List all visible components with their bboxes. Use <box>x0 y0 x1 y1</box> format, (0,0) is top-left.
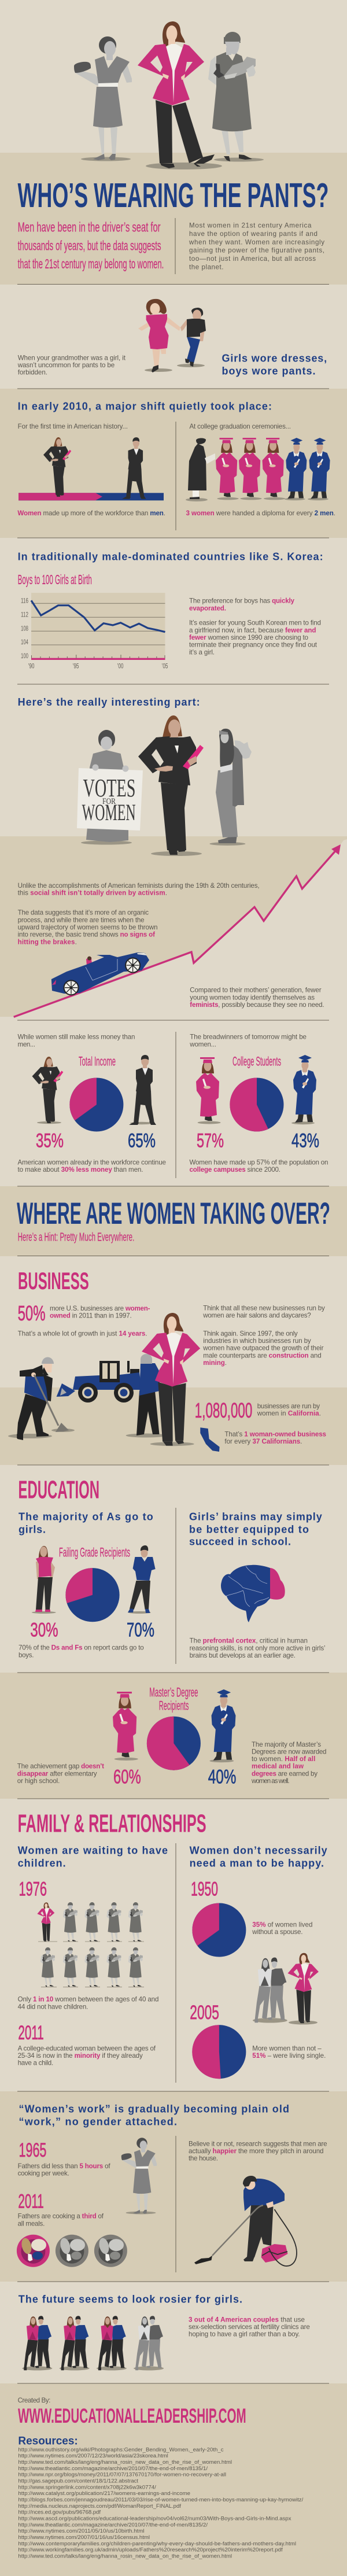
text: minority <box>18 2044 156 2067</box>
pie chart: failing grades <box>65 1568 120 1622</box>
heading: interesting part: Here’s the really interesting part: <box>18 696 200 708</box>
credit label: Created By: <box>18 2397 50 2404</box>
percentages: 57% <box>197 1130 224 1152</box>
heading: resources: Resources: <box>18 2435 78 2448</box>
chart: workforce bar <box>19 493 164 500</box>
text: minority: 25-34 is now in the minority if they already <box>18 2052 143 2060</box>
text: think again: Think that all these new businesses run by <box>203 1304 325 1312</box>
heading: need a man: need a man to be happy. <box>190 1858 324 1869</box>
panel: South Korea and interesting part background <box>0 538 347 836</box>
heading: majority of As: The majority of As go to <box>19 1511 153 1522</box>
illustration: girl casual <box>32 1546 56 1614</box>
resources list: http://www.nytimes.com/2011/05/10/us/10birth.html <box>18 2528 145 2534</box>
panel: growth chart light area <box>0 839 347 1186</box>
text: a third: all meals. <box>18 2220 45 2227</box>
percentages: 70% <box>127 1619 154 1641</box>
illustration: suffragist with votes for women sign: FOR <box>102 797 116 806</box>
text: happier: actually happier the more they pitch in around <box>189 2147 324 2155</box>
intro lead text: Men have been in the driver’s seat for <box>18 220 161 235</box>
resources list: http://www.npr.org/blogs/money/2011/07/07/137670170/for-women-no-recovery-at-all <box>18 2472 226 2478</box>
text: 30% less money <box>17 1158 166 1173</box>
resources list: http://blogs.forbes.com/jennagoudreau/2011/03/03/rise-of-women-turned-men-into-boys-manning-up-kay-hymowitz/ <box>18 2497 304 2503</box>
resources list: http://media.nucleus.naprojects.com/pdf/WomanReport_FINAL.pdf <box>18 2503 181 2509</box>
grandmother text: wasn’t uncommon for pants to be <box>17 361 115 369</box>
text: 35% without spouse <box>252 1921 312 1936</box>
text: a third: Fathers are cooking a third of <box>18 2213 104 2220</box>
text: master's majority: degrees are earned by <box>252 1770 318 1777</box>
text: California <box>224 1403 326 1445</box>
South Korea text: The preference for boys has quickly <box>189 597 295 605</box>
pie chart: 1950 <box>192 1903 246 1957</box>
text: California: That’s 1 woman-owned business <box>224 1430 326 1438</box>
resources list: http://www.nytimes.com/2007/01/16/us/16census.html <box>18 2534 150 2541</box>
intro paragraph <box>189 222 324 271</box>
illustration: graduation row <box>186 438 330 501</box>
text: 1 in 10: Only 1 in 10 women between the ages of 40 and <box>18 1996 158 2003</box>
illustration: girl in dress and boy in jeans <box>138 299 206 372</box>
text: achievement gap <box>17 1763 104 1785</box>
intro paragraph: the planet. <box>189 264 223 271</box>
panel: future background <box>0 2282 347 2383</box>
chart: boys to 100 girls line chart: ’00 <box>117 662 124 670</box>
resources list: http://www.ted.com/talks/lang/eng/hanna_rosin_new_data_on_the_rise_of_women.html <box>18 2459 232 2466</box>
heading: women's work: “work,” no gender attached. <box>19 2116 177 2128</box>
text: prefrontal cortex: brains but develops at an earlier age. <box>190 1652 296 1659</box>
South Korea text: a girlfriend now, in fact, because fewer and <box>189 626 316 634</box>
text: think again: industries in which businesses run by <box>203 1337 311 1345</box>
panel: family background <box>0 1799 347 2091</box>
text: 3 out of 4 couples <box>189 2316 310 2338</box>
text: breadwinners: The breadwinners of tomorrow might be <box>190 1034 307 1041</box>
illustration: second worker <box>126 1354 167 1438</box>
South Korea text: evaporated. <box>189 604 226 612</box>
text: achievement gap: disappear after elementary <box>17 1770 97 1777</box>
South Korea text <box>189 597 321 656</box>
pie chart: college students <box>230 1077 283 1131</box>
panel: hero floor and intro background <box>0 153 347 285</box>
resources list: http://www.nytimes.com/2007/12/23/world/asia/23skorea.html <box>18 2453 168 2459</box>
panel: master's degree background <box>0 1673 347 1799</box>
text: organic process: upward trajectory of women seems to be thrown <box>18 924 158 931</box>
illustration: bulldozer <box>57 1361 142 1403</box>
percentages <box>113 1766 236 1788</box>
text: 30% less money: to make about 30% less money than men. <box>17 1166 143 1173</box>
panel: credits background <box>0 2383 347 2576</box>
illustration: master's graduate woman <box>113 1692 138 1761</box>
chart: boys to 100 girls line chart: 100 <box>21 652 28 660</box>
South Korea text: fewer women since 1990 are choosing to <box>189 634 308 641</box>
diploma caption: 3 women were handed a diploma for every 2 men. <box>186 510 335 517</box>
intro lead text: that the 21st century may belong to women. <box>18 256 164 271</box>
text: achievement gap: The achievement gap doesn’t <box>17 1763 104 1770</box>
grandmother text: forbidden. <box>18 369 47 377</box>
heading: girls' brains: be better equipped to <box>189 1524 309 1536</box>
panel: major shift background <box>0 389 347 538</box>
illustration: suffragist with votes for women sign <box>77 730 143 844</box>
resources list: http://nces.ed.gov/pubs/96768.pdf <box>18 2509 101 2516</box>
South Korea text: terminate their pregnancy once they find out <box>189 641 318 649</box>
chart: boys to 100 girls line chart: ’05 <box>162 662 168 670</box>
text: prefrontal cortex <box>190 1637 326 1659</box>
percentages: 30% <box>30 1619 58 1641</box>
panel: business background <box>0 1256 347 1387</box>
text: 35% without spouse: 35% of women lived <box>252 1921 312 1928</box>
intro paragraph: Most women in 21st century America <box>189 222 312 229</box>
heading: major shift: In early 2010, a major shift quietly took place: <box>18 400 272 412</box>
callout: girls wore dresses: boys wore pants. <box>222 366 316 377</box>
text: 3 out of 4 couples: hoping to have a girl rather than a boy. <box>189 2331 300 2338</box>
chart: boys to 100 girls line chart: 112 <box>21 611 28 619</box>
text: women-owned: owned in 2011 than in 1997. <box>50 1312 132 1320</box>
chart: rising trend line with arrow <box>14 844 341 1017</box>
pie chart: 2005 <box>192 2025 246 2079</box>
text: California: for every 37 Californians. <box>224 1438 302 1445</box>
illustration: worker with shovel <box>8 1357 75 1440</box>
grandmother text: When your grandmother was a girl, it <box>18 354 126 361</box>
percentages: 60% <box>113 1766 141 1788</box>
intro paragraph: too—not just in America, but all across <box>189 255 316 263</box>
subtitle: Here’s a Hint: Pretty Much Everywhere. <box>18 1231 134 1244</box>
illustration: man total income <box>129 1055 156 1125</box>
section heading: family and relationships: FAMILY & RELATIONSHIPS <box>18 1809 206 1837</box>
illustration: graduate man <box>291 1055 316 1124</box>
text: activism <box>18 882 260 897</box>
South Korea text: it’s a girl. <box>189 648 215 656</box>
percentages: 43% <box>291 1130 319 1152</box>
text: organic process <box>18 909 158 946</box>
stat: 1,080,000: 1,080,000 <box>195 1398 252 1422</box>
text: organic process: process, and while there are times when the <box>18 916 145 924</box>
text: college campuses: Women have made up 57% of the population on <box>190 1158 328 1166</box>
chart: boys to 100 girls line chart: 116 <box>21 597 28 605</box>
heading: future: The future seems to look rosier for girls. <box>19 2294 242 2305</box>
heading: waiting: children. <box>18 1858 66 1869</box>
year 1950: 1950 <box>191 1878 218 1900</box>
panel: growth chart tan area <box>0 836 347 1017</box>
panel: business floor <box>0 1387 347 1465</box>
text: happier <box>189 2140 327 2162</box>
workforce caption: Women made up more of the workforce than men. <box>17 510 165 517</box>
illustration: brain <box>221 1565 285 1622</box>
chart title: Boys to 100 Girls at Birth <box>18 572 92 587</box>
chart title: college students: College Students <box>232 1054 281 1069</box>
chart: boys to 100 girls line chart: ’90 <box>28 662 35 670</box>
percentages: 65% <box>128 1130 156 1152</box>
percentages: 40% <box>208 1766 236 1788</box>
text: think again: male counterparts are construction and <box>203 1352 322 1359</box>
text: 1 in 10: 44 did not have children. <box>18 2003 88 2010</box>
pictogram: 3 of 4 couples <box>22 2316 164 2370</box>
heading: majority of As: girls. <box>19 1524 46 1536</box>
resources list: http://www.contemporaryfamilies.org/children-parenting/why-every-day-should-be-fathers-and-mothers-day.html <box>18 2541 296 2547</box>
pie chart: master's degrees <box>147 1717 201 1770</box>
text: college campuses: college campuses since 2000. <box>190 1166 280 1173</box>
illustration: gray couple <box>253 1957 287 2023</box>
text: master's majority: women as well. <box>251 1777 290 1785</box>
text: 30% less money: American women already in the workforce continue <box>17 1158 166 1166</box>
stat: 50%: 50% <box>18 1301 46 1325</box>
illustration: woman in pink towering <box>142 1313 200 1446</box>
South Korea text: It’s easier for young South Korean men to find <box>189 619 321 627</box>
illustration: suffragist with votes for women sign: VOTES <box>83 774 135 802</box>
resources list: http://www.ascd.org/publications/educational-leadership/nov04/vol62/num03/With-Boys-and-Girls-in-Mind.aspx <box>18 2515 291 2522</box>
text: 5 hours: cooking per week. <box>18 2170 69 2178</box>
panel: where are women taking over background <box>0 1186 347 1256</box>
section heading: business: BUSINESS <box>18 1267 89 1294</box>
heading: waiting: Women are waiting to have <box>18 1845 168 1857</box>
percentages <box>36 1130 319 1152</box>
text: feminists <box>190 987 324 1009</box>
graduation caption top: At college graduation ceremonies... <box>190 423 291 430</box>
icon: California map <box>200 1427 220 1452</box>
text: think again: Think again. Since 1997, the only <box>203 1330 298 1337</box>
text: 51% single: More women than not – <box>252 2044 322 2052</box>
pictogram: 1 in 10 women <box>37 1902 144 1987</box>
text: Ds and Fs <box>19 1644 144 1659</box>
heading: women's work <box>19 2103 289 2128</box>
text: feminists: Compared to their mothers’ generation, fewer <box>190 987 322 994</box>
illustration: graduate woman <box>196 1057 221 1124</box>
text: prefrontal cortex: The prefrontal cortex, critical in human <box>190 1637 308 1645</box>
text: less money: men... <box>17 1040 35 1048</box>
text: Ds and Fs: 70% of the Ds and Fs on report cards go to <box>19 1644 144 1652</box>
resources list: http://www.theatlantic.com/magazine/archive/2010/07/the-end-of-men/8135/1/ <box>18 2466 208 2472</box>
resources list: http://www.ted.com/talks/lang/eng/hanna_rosin_new_data_on_the_rise_of_women.html <box>18 2553 232 2559</box>
chart: boys to 100 girls line chart: 104 <box>21 638 28 646</box>
text: prefrontal cortex: reasoning skills, is not only more active in girls’ <box>190 1644 326 1652</box>
intro paragraph: when they want. Women are increasingly <box>189 238 324 246</box>
chart: boys to 100 girls line chart <box>21 593 168 670</box>
text: a third <box>18 2213 104 2227</box>
text: 5 hours <box>18 2162 110 2178</box>
chart title: master's degree recipients <box>149 1685 198 1713</box>
intro lead text: thousands of years, but the data suggests <box>18 238 161 253</box>
heading: waiting <box>18 1845 168 1869</box>
text: breadwinners: women... <box>189 1040 216 1048</box>
workforce caption top: For the first time in American history... <box>18 423 128 430</box>
text: achievement gap: or high school. <box>17 1777 60 1785</box>
icon: gray plate <box>56 2235 88 2267</box>
text: breadwinners <box>189 1034 307 1048</box>
text: organic process: The data suggests that it’s more of an organic <box>18 909 149 917</box>
text: 5 hours: Fathers did less than 5 hours of <box>18 2162 110 2170</box>
illustration: single woman in pink <box>287 1953 319 2024</box>
text: master's majority: to women. Half of all <box>252 1755 315 1763</box>
text: women-owned: That’s a whole lot of growth in just 14 years. <box>18 1330 147 1337</box>
illustration: convertible car <box>51 953 149 995</box>
text: master's majority <box>251 1741 326 1785</box>
illustration: boy casual <box>128 1545 156 1614</box>
illustration: businesswoman <box>43 437 71 497</box>
resources list: http://www.outhistory.org/wiki/Photographs:Gender_Bending_Women,_early-20th_c <box>18 2446 224 2453</box>
illustration: businesswoman center <box>138 715 204 856</box>
text: college campuses <box>190 1158 328 1173</box>
illustration: woman total income <box>32 1057 63 1124</box>
year 2011: 2011 <box>18 2022 44 2044</box>
heading: need a man: Women don’t necessarily <box>190 1845 327 1857</box>
heading: girls' brains: Girls’ brains may simply <box>189 1511 322 1522</box>
intro paragraph: have the option of wearing pants if and <box>189 230 318 238</box>
pie chart: total income <box>69 1078 123 1131</box>
year 2011: 2011 <box>18 2190 44 2212</box>
text: 51% single <box>252 2044 326 2060</box>
illustration: master's graduate man <box>209 1689 236 1762</box>
chart: boys to 100 girls line chart: 108 <box>21 625 28 633</box>
text: master's majority: Degrees are now awarded <box>252 1748 326 1756</box>
year 1965: 1965 <box>19 2139 46 2161</box>
year 1976: 1976 <box>19 1878 47 1900</box>
panel: education background <box>0 1465 347 1673</box>
chart title: failing grade recipients: Failing Grade Recipients <box>59 1545 130 1560</box>
text: master's majority: The majority of Master’s <box>252 1741 321 1748</box>
icon: gray plate <box>94 2235 127 2267</box>
text: California: women in California. <box>257 1410 321 1418</box>
year 2005: 2005 <box>190 2002 219 2024</box>
heading: girls' brains <box>189 1511 322 1548</box>
text: women-owned <box>18 1305 150 1337</box>
text: minority: A college-educated woman between the ages of <box>18 2044 156 2052</box>
illustration: suffragist with votes for women sign: WOMEN <box>82 799 136 825</box>
text: organic process: into reverse, the basic trend shows no signs of <box>18 931 155 939</box>
text: organic process: hitting the brakes. <box>18 938 77 946</box>
text: 3 out of 4 couples: 3 out of 4 American couples that use <box>189 2316 305 2323</box>
panel: grandmother background <box>0 285 347 389</box>
text: Ds and Fs: boys. <box>19 1651 34 1659</box>
chart title: total income: Total Income <box>79 1054 116 1069</box>
grandmother text <box>17 354 126 377</box>
resources list: http://www.catalyst.org/publication/217/womens-earnings-and-income <box>18 2490 190 2497</box>
panel: women's work background <box>0 2091 347 2282</box>
text: women-owned: more U.S. businesses are women- <box>50 1305 150 1312</box>
text: activism: Unlike the accomplishments of American feminists during the 19th & 20th centuries, <box>18 882 260 890</box>
panel: hero background <box>0 0 347 153</box>
text: activism: this social shift isn’t totally driven by activism. <box>18 890 167 897</box>
text: think again: women have outpaced the growth of their <box>202 1345 324 1352</box>
resources list: http://gas.sagepub.com/content/18/1/122.abstract <box>18 2478 138 2485</box>
illustration: three women <box>74 21 264 169</box>
text: 35% without spouse: without a spouse. <box>252 1928 303 1936</box>
text: think again <box>202 1304 325 1367</box>
text: think again: mining. <box>203 1359 227 1367</box>
resources list <box>18 2446 304 2559</box>
illustration: hippie <box>209 729 252 846</box>
text: California: businesses are run by <box>257 1403 320 1410</box>
heading: South Korea: In traditionally male-dominated countries like S. Korea: <box>18 551 323 562</box>
text: less money: While women still make less money than <box>17 1034 135 1041</box>
illustration: housewife with cake <box>121 2138 157 2214</box>
callout: girls wore dresses: Girls wore dresses, <box>222 353 327 364</box>
chart title: master's degree recipients: Recipients <box>159 1699 189 1713</box>
text: happier: the house. <box>189 2155 218 2162</box>
icon: pink plate <box>17 2235 50 2267</box>
heading: majority of As <box>19 1511 153 1536</box>
text: 3 out of 4 couples: sex-selection services at fertility clinics are <box>189 2323 310 2331</box>
text: master's majority: medical and law <box>252 1763 304 1770</box>
resources list: http://www.workingfamilies.org.uk/admin/uploads/Fathers%20research%20project%20interim%20report.pdf <box>18 2547 283 2553</box>
callout: girls wore dresses <box>222 353 327 377</box>
heading: women's work: “Women’s work” is gradually becoming plain old <box>19 2103 289 2115</box>
resources list: http://www.theatlantic.com/magazine/archive/2010/07/the-end-of-men/8135/2/ <box>18 2522 208 2528</box>
intro lead text <box>18 220 164 271</box>
percentages <box>30 1619 154 1641</box>
chart: boys to 100 girls line chart: ’95 <box>73 662 79 670</box>
text: think again: women are hair salons and daycares? <box>202 1312 311 1319</box>
intro paragraph: gaining the power of the figurative pants, <box>189 247 324 254</box>
heading: girls' brains: succeed in school. <box>189 1536 291 1548</box>
text: 51% single: 51% – were living single. <box>252 2052 326 2060</box>
text: less money <box>17 1034 135 1048</box>
text: minority: have a child. <box>18 2060 53 2067</box>
text: feminists: feminists, possibly because they see no need. <box>190 1001 324 1009</box>
text: feminists: young women today identify themselves as <box>190 994 315 1001</box>
text: 1 in 10 <box>18 1996 158 2010</box>
percentages: 35% <box>36 1130 64 1152</box>
chart title: master's degree recipients: Master’s Degree <box>149 1685 198 1699</box>
illustration: man vacuuming <box>194 2176 297 2266</box>
resources list: http://www.springerlink.com/content/x708j22k6w3k0774/ <box>18 2484 156 2490</box>
illustration: businessman <box>122 437 146 499</box>
section heading: education: EDUCATION <box>19 1476 99 1504</box>
heading: need a man <box>190 1845 327 1869</box>
text: happier: Believe it or not, research suggests that men are <box>189 2140 327 2147</box>
